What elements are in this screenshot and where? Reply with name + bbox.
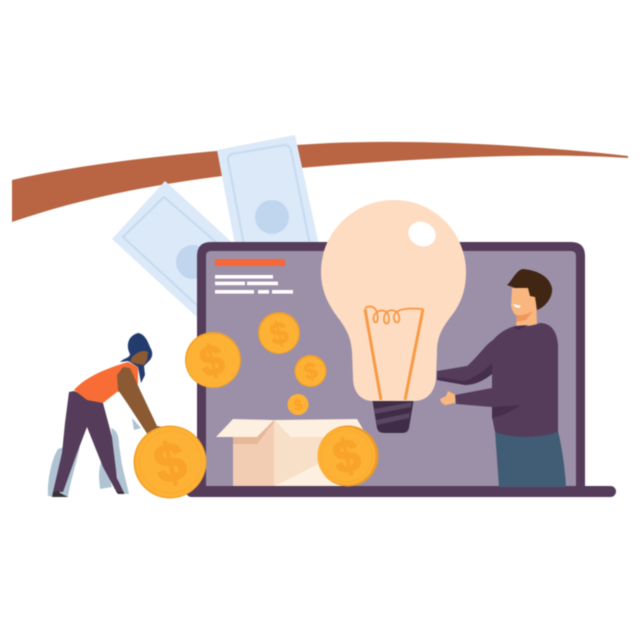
woman shoes	[52, 491, 124, 497]
woman	[48, 333, 164, 497]
coin large by box: $	[328, 428, 365, 484]
ground shadows	[48, 418, 141, 497]
man sweater	[437, 323, 558, 437]
coin small	[288, 394, 308, 415]
brown swoosh	[12, 142, 628, 222]
man hair	[507, 269, 552, 310]
woman arm	[117, 367, 164, 435]
filament	[365, 306, 423, 400]
left flap	[216, 419, 274, 437]
sweater shadows	[437, 325, 528, 418]
woman hair	[120, 333, 152, 383]
box right face	[274, 420, 346, 486]
woman top	[74, 362, 138, 403]
man	[437, 269, 566, 487]
coin upper	[258, 312, 300, 354]
right flap	[274, 419, 364, 437]
man trousers	[495, 431, 566, 487]
cardboard box	[216, 419, 364, 486]
woman face	[130, 351, 148, 365]
smile	[513, 304, 521, 308]
large foreground coin	[134, 426, 206, 498]
coin medium: $	[301, 357, 320, 385]
laptop	[186, 242, 616, 497]
coin left	[185, 332, 241, 388]
coin small: $	[292, 396, 305, 415]
box left face	[233, 420, 274, 486]
neck shadow	[516, 311, 533, 322]
bulb socket	[372, 398, 414, 433]
light bulb	[321, 200, 466, 433]
coin upper: $	[266, 314, 292, 353]
coin large by box	[318, 426, 378, 486]
bulb highlight	[404, 217, 440, 251]
coin medium	[294, 355, 326, 387]
banknote right	[217, 135, 320, 250]
woman trousers	[53, 391, 124, 493]
flap shadow	[233, 420, 274, 444]
banknote left	[112, 181, 235, 320]
screen text bars	[215, 259, 293, 294]
bulb glass	[321, 200, 466, 401]
large foreground coin: $	[148, 430, 192, 496]
man neck and face	[511, 287, 537, 326]
coin left: $	[195, 335, 229, 386]
man hand	[440, 391, 456, 405]
